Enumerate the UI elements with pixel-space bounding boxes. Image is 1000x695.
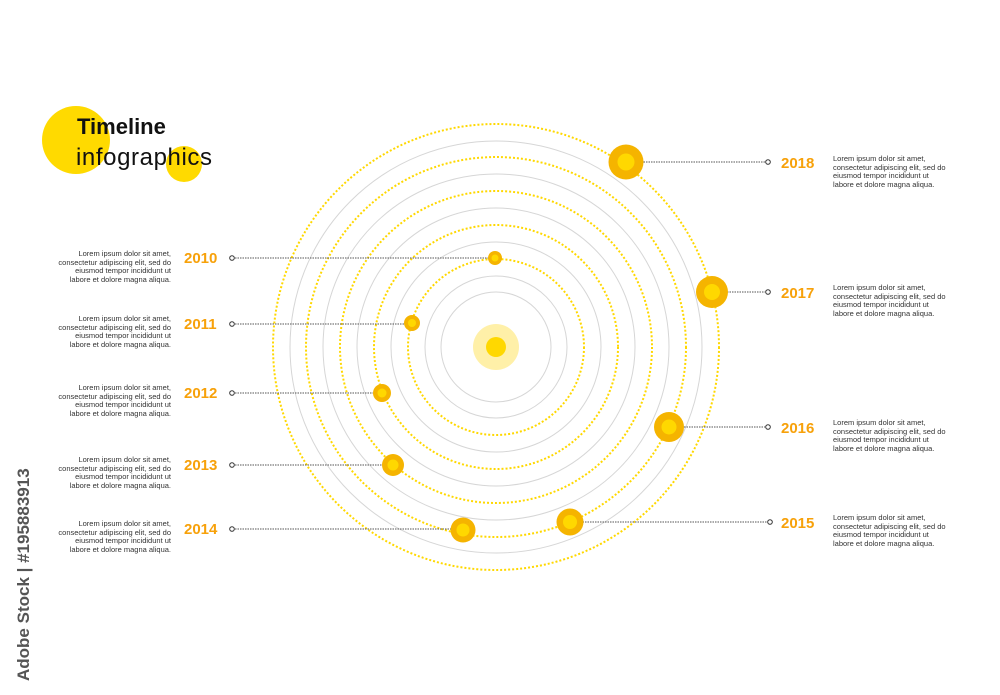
right labels: eiusmod tempor incididunt ut [833,171,930,180]
planets [373,144,728,542]
right labels: eiusmod tempor incididunt ut [833,530,930,539]
right labels: Lorem ipsum dolor sit amet, [833,154,926,163]
left labels: Lorem ipsum dolor sit amet, [78,249,171,258]
left labels: 2014 [184,521,218,538]
right labels: consectetur adipiscing elit, sed do [833,522,946,531]
title: infographics [76,144,212,171]
right labels: consectetur adipiscing elit, sed do [833,292,946,301]
left labels: consectetur adipiscing elit, sed do [58,528,171,537]
right labels: eiusmod tempor incididunt ut [833,435,930,444]
title [42,106,212,182]
right labels: labore et dolore magna aliqua. [833,309,934,318]
left labels: Lorem ipsum dolor sit amet, [78,383,171,392]
right labels: labore et dolore magna aliqua. [833,539,934,548]
left labels: eiusmod tempor incididunt ut [75,266,172,275]
endpoint markers [230,160,772,531]
left labels: eiusmod tempor incididunt ut [75,400,172,409]
right labels [781,154,946,548]
right labels: 2015 [781,515,814,532]
right labels: eiusmod tempor incididunt ut [833,300,930,309]
left labels: labore et dolore magna aliqua. [70,275,171,284]
orbit diagram [273,124,719,570]
right labels: consectetur adipiscing elit, sed do [833,163,946,172]
watermark text: Adobe Stock | #195883913 [14,468,33,681]
right labels: 2017 [781,285,814,302]
left labels: eiusmod tempor incididunt ut [75,472,172,481]
right labels: labore et dolore magna aliqua. [833,180,934,189]
connector lines [235,162,767,529]
left labels: consectetur adipiscing elit, sed do [58,464,171,473]
right labels: Lorem ipsum dolor sit amet, [833,283,926,292]
left labels: 2011 [184,316,217,333]
icon: center sun [473,324,519,370]
left labels: 2012 [184,385,217,402]
left labels: eiusmod tempor incididunt ut [75,536,172,545]
right labels: labore et dolore magna aliqua. [833,444,934,453]
left labels: Lorem ipsum dolor sit amet, [78,314,171,323]
left labels: consectetur adipiscing elit, sed do [58,323,171,332]
left labels: 2013 [184,457,217,474]
left labels [58,249,218,554]
right labels: consectetur adipiscing elit, sed do [833,427,946,436]
right labels: 2018 [781,155,814,172]
title: Timeline [77,114,166,139]
right labels: Lorem ipsum dolor sit amet, [833,418,926,427]
left labels: consectetur adipiscing elit, sed do [58,258,171,267]
left labels: 2010 [184,250,217,267]
left labels: Lorem ipsum dolor sit amet, [78,519,171,528]
right labels: 2016 [781,420,814,437]
left labels: Lorem ipsum dolor sit amet, [78,455,171,464]
left labels: eiusmod tempor incididunt ut [75,331,172,340]
left labels: consectetur adipiscing elit, sed do [58,392,171,401]
left labels: labore et dolore magna aliqua. [70,481,171,490]
left labels: labore et dolore magna aliqua. [70,409,171,418]
left labels: labore et dolore magna aliqua. [70,340,171,349]
right labels: Lorem ipsum dolor sit amet, [833,513,926,522]
left labels: labore et dolore magna aliqua. [70,545,171,554]
